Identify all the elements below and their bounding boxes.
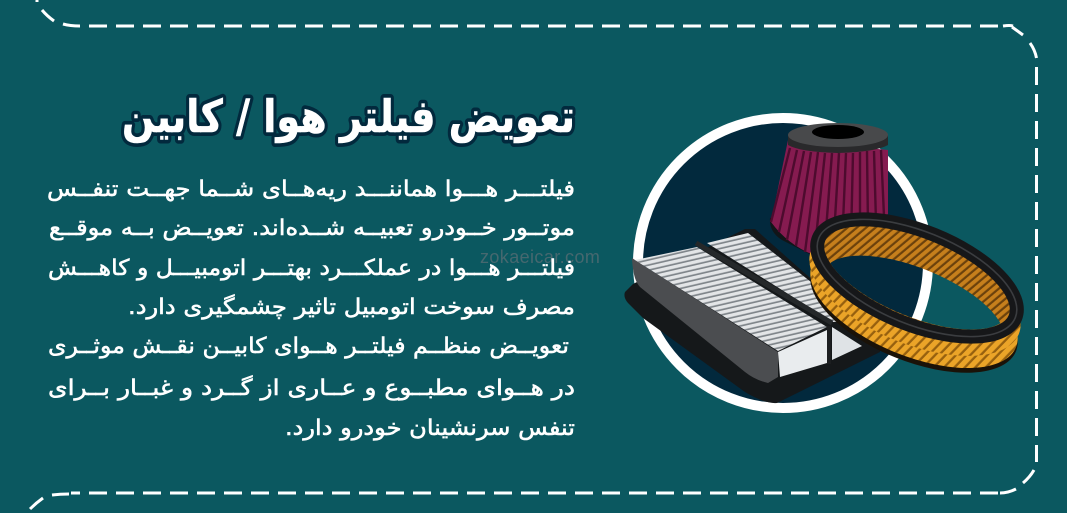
conical air filter <box>770 123 888 262</box>
side wall sweep <box>810 268 1018 368</box>
pleats right <box>707 233 860 322</box>
rim highlight <box>816 218 1018 338</box>
rubber rim <box>810 212 1024 344</box>
pleated body <box>771 140 888 258</box>
inner wall <box>824 226 1010 330</box>
end divider <box>827 326 831 364</box>
round orange air filter <box>809 212 1024 373</box>
line 7: تنفس سرنشینان خودرو دارد. <box>285 416 575 441</box>
line 3: فیلتـــر هـــوا در عملکـــرد بهتـــر اتومبیـــل و کاهـــش <box>48 256 575 281</box>
grey front side <box>632 258 778 383</box>
outer wall fill <box>809 252 1021 356</box>
panel air filter <box>624 229 880 403</box>
line 5: تعویــض منظــم فیلتــر هــوای کابیــن نقــش موثــری <box>48 334 569 359</box>
pleats left <box>635 247 827 351</box>
white end faces <box>778 330 827 377</box>
pleat lines <box>771 148 884 256</box>
line 4: مصرف سوخت اتومبیل تاثیر چشمگیری دارد. <box>128 294 575 320</box>
centre bar <box>696 243 832 323</box>
line 2: موتــور خــودرو تعبیــه شــده‌اند. تعویــض بــه موقــع <box>49 216 575 241</box>
cap hole <box>812 125 864 139</box>
cap top <box>788 123 888 147</box>
lower rim edge <box>810 276 1018 373</box>
line 6: در هــوای مطبــوع و عــاری از گــرد و غبــار بــرای <box>48 375 575 401</box>
flange <box>624 229 880 403</box>
filter base <box>770 215 850 262</box>
white end face right <box>832 327 862 360</box>
photo circle <box>638 118 928 408</box>
line 1: فیلتـــر هـــوا هماننـــد ریه‌هــای شــما جهــت تنفــس <box>47 177 575 202</box>
rubber cap <box>788 135 888 153</box>
title: تعویض فیلتر هوا / کابین <box>122 90 575 143</box>
watermark: zokaeicar.com <box>480 247 600 267</box>
body text <box>47 177 575 441</box>
title: تعویض فیلتر هوا / کابین <box>122 90 575 143</box>
